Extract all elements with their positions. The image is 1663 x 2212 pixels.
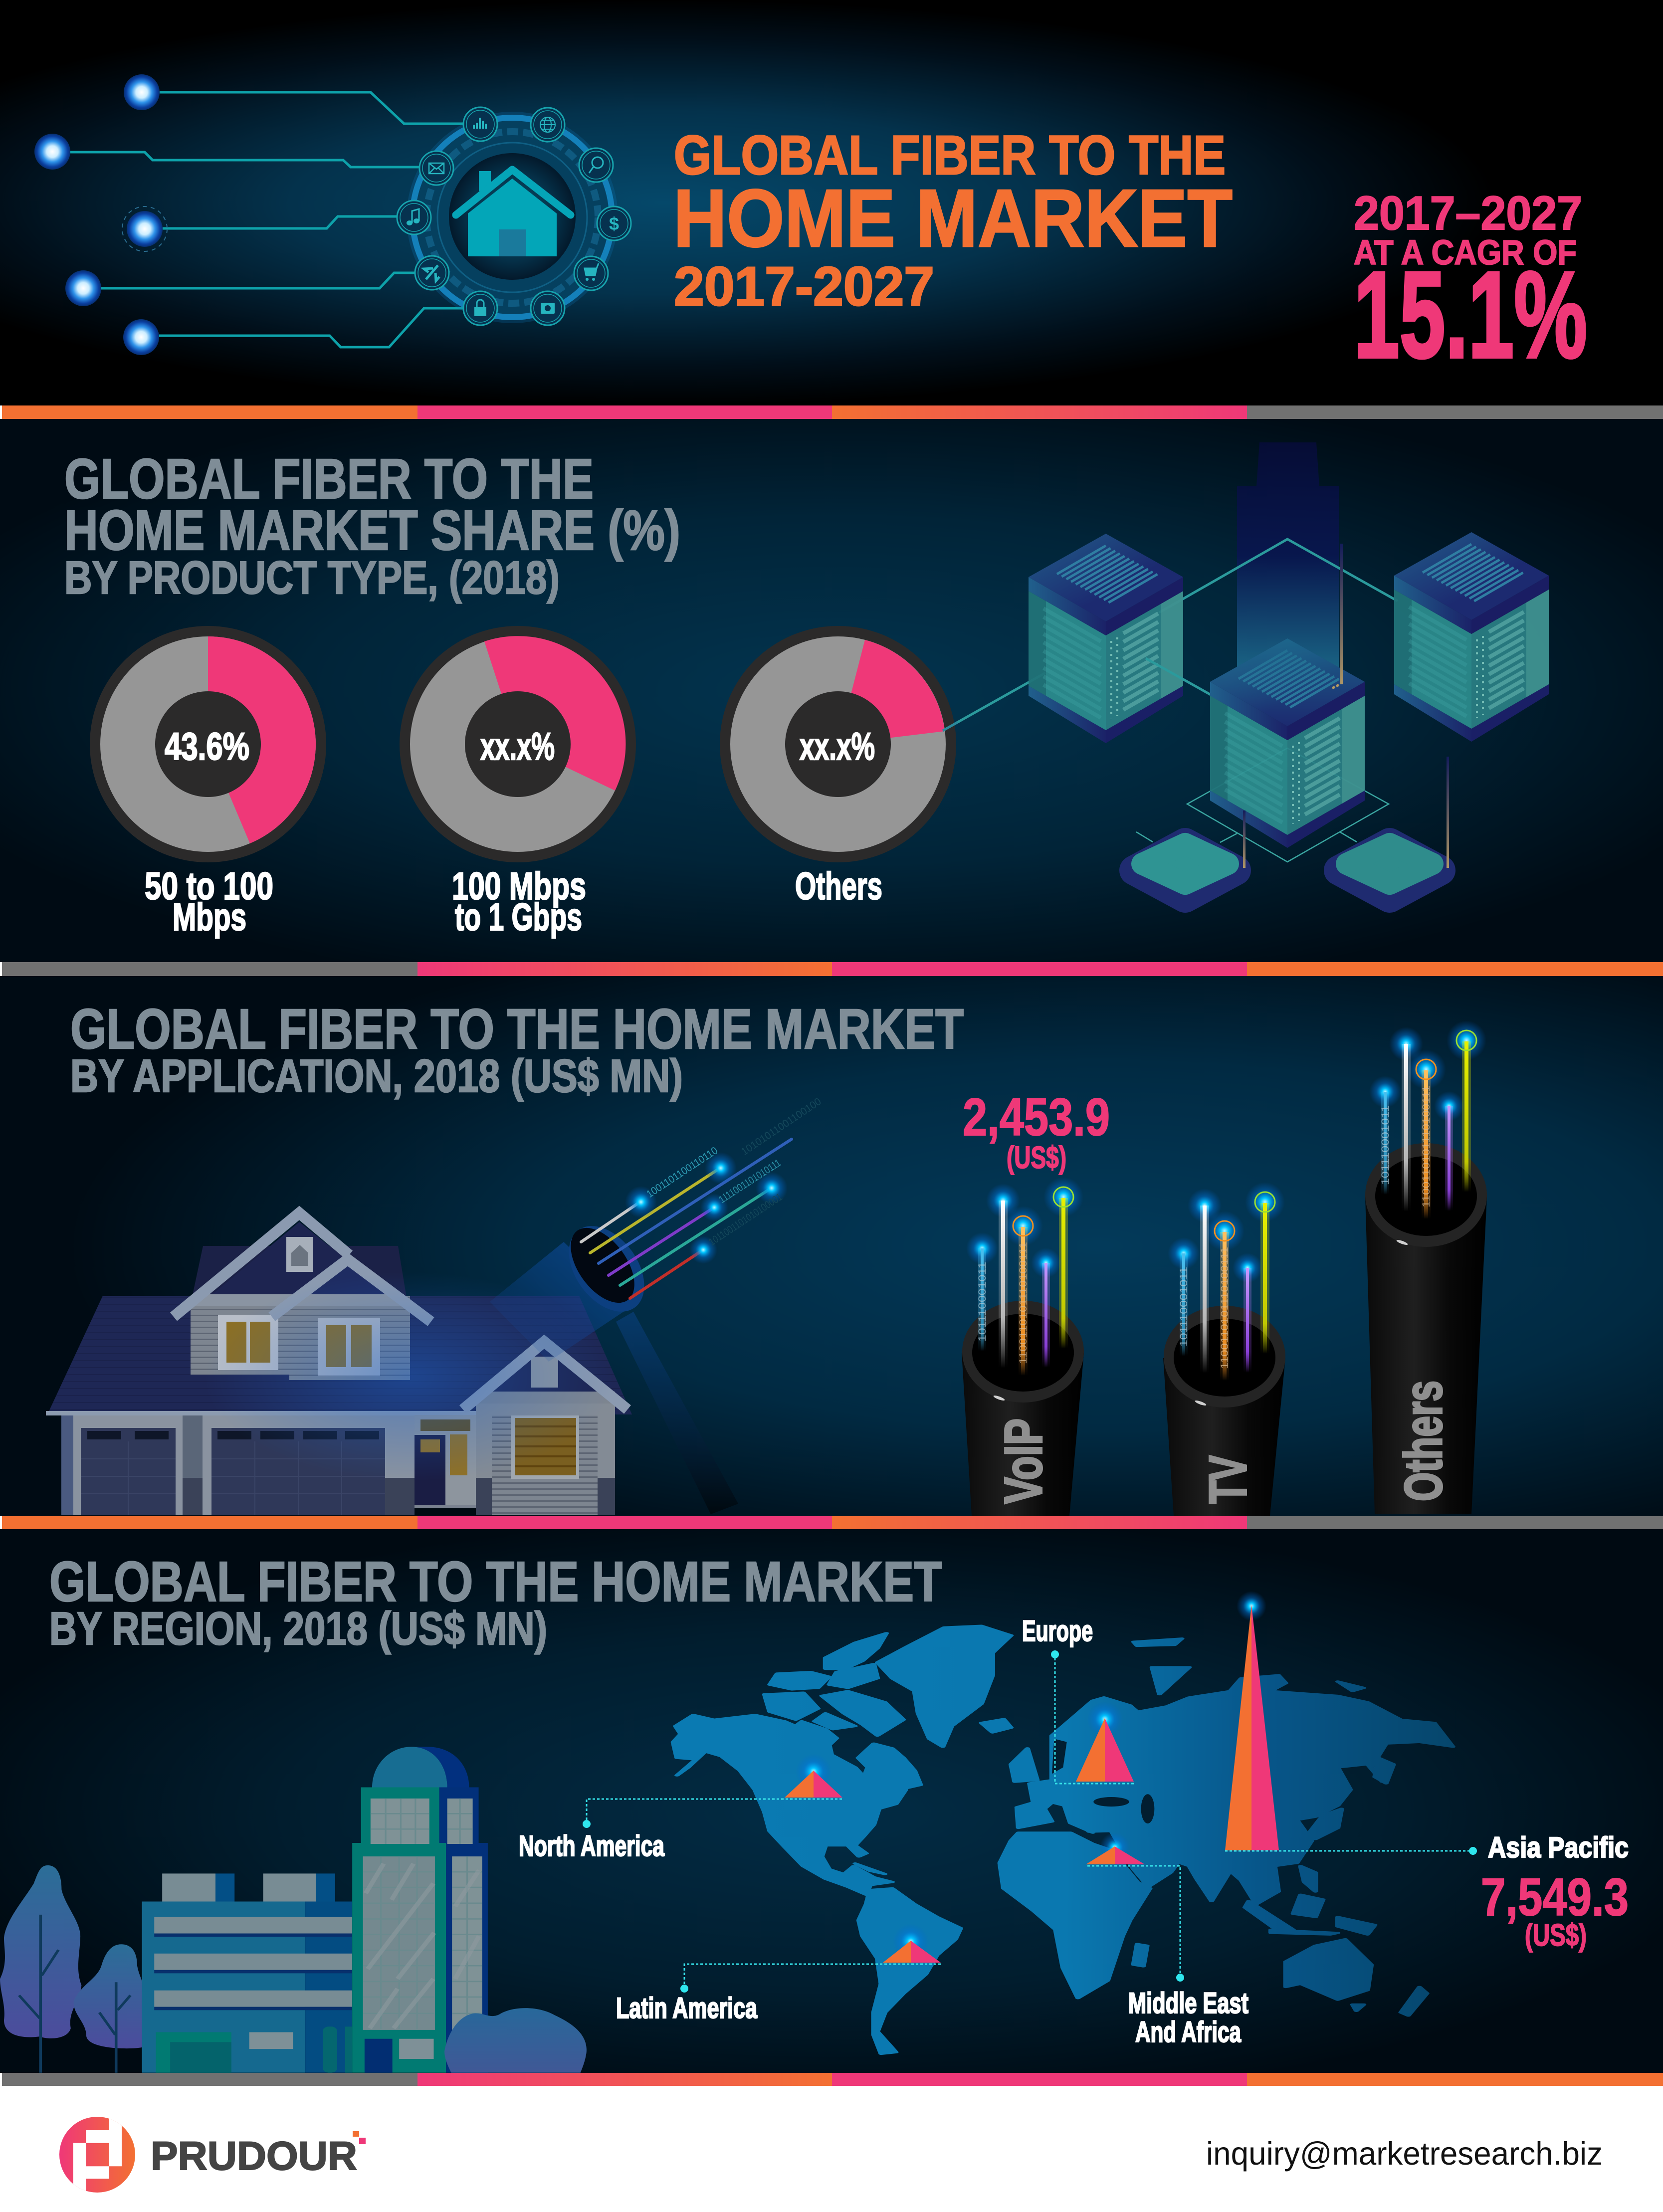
world map <box>673 1626 1453 2054</box>
icon: lock <box>474 300 486 316</box>
divider bar 2 <box>2 962 1663 976</box>
illustration: house <box>46 1213 738 1515</box>
icon: plane <box>424 265 439 281</box>
region labels: Latin America <box>616 1992 758 2024</box>
fiber cable: VoIP <box>962 1177 1084 1516</box>
value label: VoIP: 2,453.9 <box>963 1088 1110 1147</box>
icon: globe <box>540 117 555 132</box>
illustration: isometric servers <box>945 442 1549 898</box>
donut: Others: Others <box>795 865 882 908</box>
porch wing <box>463 1342 627 1515</box>
value label: VoIP <box>963 1088 1110 1175</box>
heading: GLOBAL FIBER TO THE HOME MARKET <box>49 1550 942 1613</box>
donut: 100 Mbps to 1 Gbps: to 1 Gbps <box>455 896 582 939</box>
donut: 50 to 100 Mbps: 50 to 100 <box>145 865 273 908</box>
title: GLOBAL FIBER TO THE <box>674 125 1226 186</box>
region labels: Asia Pacific <box>1488 1831 1629 1864</box>
logo: Prudour: PRUDOUR <box>151 2134 357 2179</box>
panel: market share by product type <box>0 419 1663 962</box>
title <box>673 125 1233 317</box>
divider bar 3 <box>2 1516 1663 1529</box>
illustration: fiber cable head <box>553 1096 824 1326</box>
pyramid: Europe <box>1051 1650 1134 1784</box>
donut: 50 to 100 Mbps <box>90 626 326 939</box>
fiber cable: Others: 1100110101110100111 <box>1421 1085 1432 1207</box>
bush <box>444 2008 587 2073</box>
garage door left <box>81 1428 176 1515</box>
fiber cable: TV: 1100110101110100111 <box>1219 1247 1231 1369</box>
fiber cable: VoIP: 1100110101110100111 <box>1018 1242 1029 1364</box>
donut: 100 Mbps to 1 Gbps: xx.x% <box>480 725 555 768</box>
callout: CAGR: 2017–2027 <box>1354 187 1582 240</box>
heading: HOME MARKET SHARE (%) <box>64 499 680 562</box>
panel: market by application <box>0 976 1663 1516</box>
tree small <box>73 1944 142 2073</box>
heading <box>64 447 680 603</box>
pyramid: Latin America <box>680 1924 941 1993</box>
illustration: buildings and trees <box>0 1747 587 2073</box>
icon: chart bars <box>474 118 486 129</box>
heading: BY REGION, 2018 (US$ MN) <box>49 1603 547 1654</box>
heading: GLOBAL FIBER TO THE <box>64 447 594 510</box>
icon: mail <box>429 163 444 174</box>
fiber cable: TV: TV <box>1199 1455 1257 1504</box>
donut: 100 Mbps to 1 Gbps <box>400 626 636 939</box>
icon: house <box>456 170 571 256</box>
heading: GLOBAL FIBER TO THE HOME MARKET <box>70 998 964 1060</box>
fiber cable: VoIP: 101110001011 <box>977 1262 988 1342</box>
heading: BY APPLICATION, 2018 (US$ MN) <box>70 1050 683 1102</box>
tower <box>352 1747 488 2073</box>
fiber cable: Others: Others <box>1394 1381 1453 1501</box>
light glow <box>205 1272 614 1481</box>
icon: magnifier <box>589 157 603 173</box>
region labels: Middle East <box>1128 1987 1248 2019</box>
dormers <box>174 1213 431 1380</box>
pyramid: North America <box>583 1754 842 1828</box>
heading <box>49 1550 942 1654</box>
door and porch <box>415 1415 476 1515</box>
title: HOME MARKET <box>673 173 1233 264</box>
callout: CAGR <box>1354 187 1587 384</box>
region labels <box>519 1615 1629 2048</box>
donut: 100 Mbps to 1 Gbps: 100 Mbps <box>452 865 586 908</box>
donut: 50 to 100 Mbps: Mbps <box>173 896 246 939</box>
fiber cable: Others: 101110001011 <box>1380 1105 1391 1185</box>
donut: Others <box>720 626 958 908</box>
fiber cable: VoIP: VoIP <box>994 1418 1053 1504</box>
icon: cart <box>585 263 599 281</box>
region labels: Europe <box>1022 1615 1093 1647</box>
value label: Asia Pacific: 7,549.3 <box>1481 1868 1629 1927</box>
panel: header <box>0 0 1663 405</box>
donut: Others: xx.x% <box>800 725 875 768</box>
router left <box>1134 843 1236 898</box>
value label: VoIP: (US$) <box>1007 1141 1066 1175</box>
footer <box>59 2117 1601 2193</box>
region labels: North America <box>519 1830 665 1862</box>
low building <box>142 1873 352 2073</box>
contact email: inquiry@marketresearch.biz <box>1206 2135 1603 2172</box>
fiber cable: TV <box>1163 1182 1285 1516</box>
divider bar 1 <box>2 405 1663 419</box>
illustration: fiber cable head: 1111001101010111 <box>717 1157 783 1206</box>
pyramid: Middle East and Africa <box>1086 1832 1184 1982</box>
illustration: fiber cable head: 1011001101010100001 <box>707 1192 784 1248</box>
region labels: And Africa <box>1135 2016 1242 2048</box>
illustration: fiber cable head: 10101011001100100 <box>739 1096 824 1158</box>
heading: BY PRODUCT TYPE, (2018) <box>64 552 560 603</box>
icon: dollar: $ <box>609 213 619 234</box>
divider bar 4 <box>2 2073 1663 2086</box>
callout: CAGR: AT A CAGR OF <box>1354 233 1577 272</box>
logo: Prudour <box>59 2115 366 2195</box>
pyramid: Asia Pacific <box>1225 1591 1477 1855</box>
fiber cable: Others <box>1365 1020 1487 1514</box>
icon: music <box>407 209 419 225</box>
network diagram: connected home <box>34 74 631 355</box>
router right <box>1339 843 1441 898</box>
donut: 50 to 100 Mbps: 43.6% <box>165 725 249 768</box>
fiber cable: TV: 101110001011 <box>1178 1267 1190 1347</box>
garage door right <box>211 1428 385 1515</box>
panel: market by region <box>0 1529 1663 2073</box>
value label: Asia Pacific <box>1481 1868 1629 1953</box>
value label: Asia Pacific: (US$) <box>1525 1918 1587 1953</box>
title: 2017-2027 <box>674 256 934 317</box>
illustration: fiber cable head: 1001101100110110 <box>644 1145 720 1200</box>
tree large <box>0 1865 81 2073</box>
icon: camera <box>541 303 555 314</box>
heading <box>70 998 964 1102</box>
